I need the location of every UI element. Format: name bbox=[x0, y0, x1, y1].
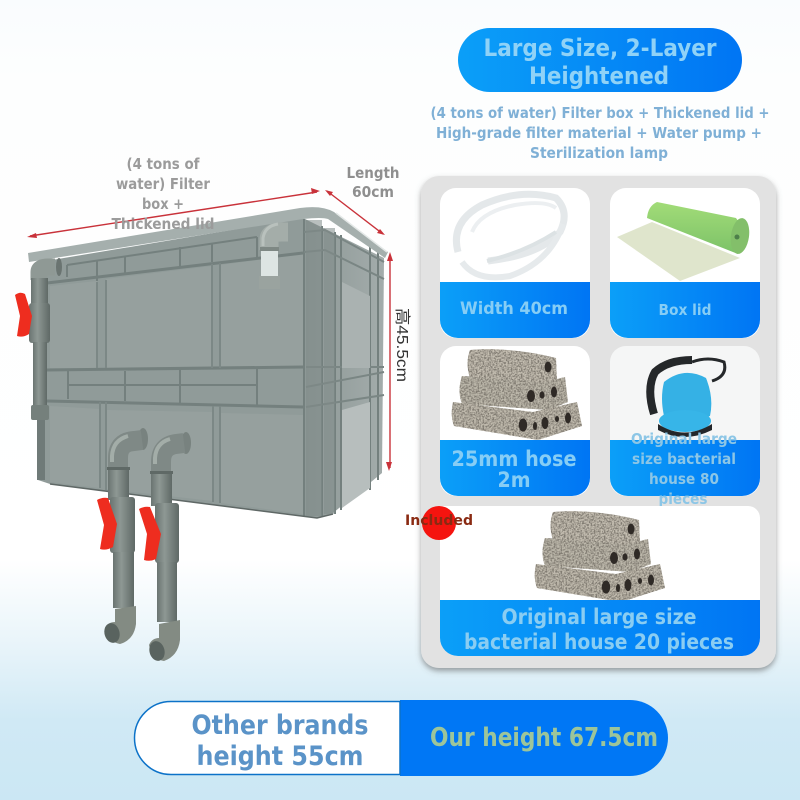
red valve handle 1 bbox=[97, 498, 117, 550]
box dimension label: Thickened lid bbox=[112, 215, 214, 233]
other brands text: Other brands bbox=[192, 710, 368, 741]
card: hose bbox=[440, 188, 590, 338]
included badge: Included bbox=[405, 513, 473, 529]
upper inlet pipe with clear tube bbox=[259, 224, 288, 289]
card: bio tubes small bbox=[440, 346, 590, 496]
box dimension label: water) Filter bbox=[116, 175, 211, 193]
box bottom edge shadow bbox=[50, 484, 333, 518]
title pill bbox=[458, 28, 742, 92]
title pill: Large Size, 2-Layer bbox=[484, 34, 717, 62]
other brands text bbox=[192, 710, 368, 772]
card: bio tubes small: 2m bbox=[498, 468, 530, 492]
left valve handle bbox=[15, 293, 32, 337]
card: bio tubes large: Original large size bbox=[502, 605, 696, 629]
height label: 高45.5cm bbox=[393, 308, 411, 382]
subtitle text: High-grade filter material + Water pump + bbox=[436, 124, 762, 142]
lower outlet pipe 1 bbox=[97, 428, 148, 645]
card: water pump: size bacterial bbox=[632, 450, 736, 468]
card: filter mat roll: Box lid bbox=[658, 301, 712, 319]
title pill: Heightened bbox=[529, 62, 669, 90]
card: filter mat roll bbox=[610, 188, 760, 338]
box dimension label bbox=[112, 155, 214, 233]
length label bbox=[346, 164, 400, 201]
card: bio tubes large bbox=[440, 506, 760, 656]
card: water pump bbox=[610, 346, 760, 508]
box lid bbox=[28, 207, 388, 262]
card: hose: Width 40cm bbox=[460, 299, 568, 319]
included badge bbox=[405, 506, 473, 540]
card: water pump: Original large bbox=[631, 430, 737, 448]
icon: clear hose coil bbox=[456, 194, 564, 277]
left side pipe and valve bbox=[15, 258, 62, 480]
box lighter front panels bbox=[50, 254, 303, 514]
card: bio tubes large: bacterial house 20 pieces bbox=[464, 630, 734, 654]
card: water pump: house 80 bbox=[649, 470, 719, 488]
length label: 60cm bbox=[352, 183, 394, 201]
icon: blue submersible pump bbox=[650, 359, 725, 437]
box ribs bbox=[47, 219, 384, 517]
subtitle text: Sterilization lamp bbox=[530, 144, 668, 162]
accessories panel bbox=[421, 176, 776, 668]
our height text: Our height 67.5cm bbox=[430, 723, 658, 753]
other brands text: height 55cm bbox=[196, 741, 364, 772]
icon: ceramic tube stack bbox=[452, 349, 582, 440]
icon: ceramic tube stack large bbox=[535, 511, 665, 602]
card: water pump: pieces bbox=[658, 490, 708, 508]
box dimension label: (4 tons of bbox=[126, 155, 200, 173]
card: bio tubes small: 25mm hose bbox=[452, 447, 576, 471]
icon: green filter roll bbox=[617, 202, 751, 281]
box front face bbox=[38, 218, 303, 516]
subtitle text bbox=[430, 104, 770, 162]
length label: Length bbox=[346, 164, 400, 182]
box dimension label: box + bbox=[142, 195, 184, 213]
height comparison bar bbox=[134, 700, 668, 776]
red valve handle 2 bbox=[139, 507, 161, 561]
box right side face bbox=[303, 218, 384, 518]
lower outlet pipe 2 bbox=[139, 432, 191, 663]
filter box product bbox=[15, 207, 388, 663]
box corner shaded ribs bbox=[306, 220, 335, 516]
dimension arrows bbox=[27, 188, 393, 471]
